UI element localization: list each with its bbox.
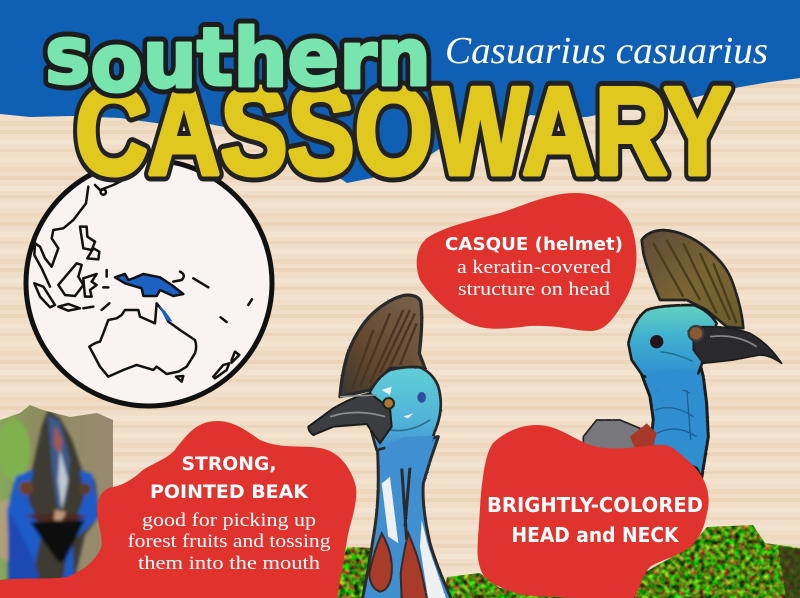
globe map of cassowary range xyxy=(26,160,272,406)
head xyxy=(370,367,441,450)
callout: head and neck xyxy=(478,425,709,598)
map: cassowary range in New Guinea xyxy=(115,274,183,296)
map: Indonesian and Philippine islands xyxy=(34,227,109,311)
map: Asian coastline xyxy=(34,187,88,287)
callout heading: POINTED BEAK xyxy=(150,481,309,503)
callout body xyxy=(457,258,612,300)
callout body: a keratin-covered xyxy=(457,258,612,278)
title: southern: southern xyxy=(45,9,431,110)
eyes xyxy=(650,326,703,348)
foliage strip along the bottom xyxy=(325,525,800,598)
casque xyxy=(340,295,425,397)
beak xyxy=(308,393,392,443)
beak xyxy=(693,327,782,363)
subtitle: scientific name: Casuarius casuarius xyxy=(445,30,768,72)
neck xyxy=(362,437,453,598)
callout: beak xyxy=(0,421,356,598)
callout heading xyxy=(150,453,309,503)
map: Australia xyxy=(89,303,196,377)
illustration: cassowary looking right xyxy=(583,230,782,478)
small photo scrap at bottom edge xyxy=(160,590,213,598)
red wattle xyxy=(630,423,657,448)
photo: cassowary head close-up xyxy=(0,400,115,590)
head xyxy=(628,305,717,377)
callout heading xyxy=(487,493,703,547)
callout body: them into the mouth xyxy=(138,553,321,574)
callout heading: BRIGHTLY-COLORED xyxy=(487,493,703,517)
callout body: forest fruits and tossing xyxy=(128,531,331,552)
callout body: good for picking up xyxy=(142,510,316,531)
title: southern: southern xyxy=(45,9,431,110)
map: New Zealand, Tasmania and Pacific islands xyxy=(95,177,252,382)
callout heading: CASQUE (helmet) xyxy=(445,234,623,255)
callout heading: STRONG, xyxy=(182,453,276,475)
callout body: structure on head xyxy=(458,280,611,300)
background: torn blue header xyxy=(0,0,800,183)
body xyxy=(583,420,640,453)
eye xyxy=(383,398,394,409)
wattles xyxy=(369,533,427,598)
neck xyxy=(640,363,708,478)
map: cassowary range in Queensland xyxy=(159,305,173,322)
illustration: cassowary looking left xyxy=(308,295,453,598)
callout heading: HEAD and NECK xyxy=(512,523,680,547)
callout: casque xyxy=(417,193,636,331)
callout body xyxy=(128,510,331,574)
casque xyxy=(642,230,743,328)
